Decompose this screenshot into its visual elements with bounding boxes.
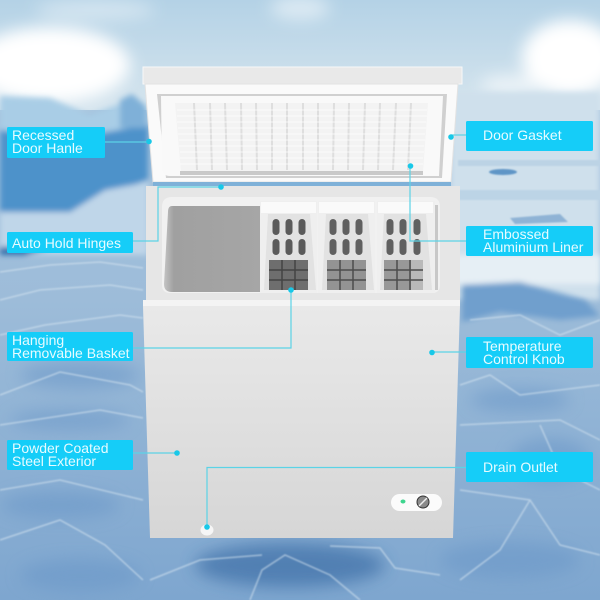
control panel: [391, 494, 442, 511]
gap between lid and cabinet: [153, 182, 451, 186]
basket 1: [260, 201, 317, 293]
far ice details right: [458, 131, 600, 224]
label: Hanging Removable Basket: Removable Basket: [12, 345, 130, 361]
label: Hanging Removable Basket: [7, 332, 133, 361]
lid: inner frame: [145, 84, 458, 182]
label: Door Gasket: [466, 121, 593, 151]
freezer: [143, 67, 462, 538]
label: Recessed Door Hanle: [7, 127, 105, 158]
lid: door gasket: [157, 94, 447, 178]
clouds: [0, 0, 600, 103]
cavity: [162, 197, 440, 293]
cabinet top: [146, 186, 460, 304]
label: Auto Hold Hinges: Auto Hold Hinges: [12, 235, 121, 251]
label: Temperature Control Knob: [466, 337, 593, 368]
label: Temperature Control Knob: Temperature: [483, 338, 562, 354]
drain outlet: [200, 524, 214, 536]
label: Door Gasket: Door Gasket: [483, 127, 562, 143]
label: Embossed Aluminium Liner: Aluminium Liner: [483, 239, 584, 255]
label: Hanging Removable Basket: Hanging: [12, 332, 64, 348]
lid: top strip: [143, 67, 462, 84]
ice blotches: [0, 361, 590, 591]
lid: embossed liner: [175, 103, 428, 175]
label: Embossed Aluminium Liner: [466, 226, 593, 256]
label: Powder Coated Steel Exterior: Powder Coated: [12, 440, 109, 456]
label: Drain Outlet: [466, 452, 593, 482]
label: Auto Hold Hinges: [7, 232, 133, 253]
label: Powder Coated Steel Exterior: [7, 440, 133, 470]
ice cracks: [0, 262, 600, 600]
basket 3: [377, 201, 435, 293]
label: Recessed Door Hanle: Door Hanle: [12, 140, 83, 156]
cabinet body: [143, 306, 460, 538]
label: Powder Coated Steel Exterior: Steel Exterior: [12, 453, 96, 469]
label: Recessed Door Hanle: Recessed: [12, 127, 74, 143]
basket 2: [318, 201, 375, 293]
label: Drain Outlet: Drain Outlet: [483, 459, 558, 475]
pale far ice right: [450, 92, 600, 300]
label: Embossed Aluminium Liner: Embossed: [483, 226, 549, 242]
cabinet front lip: [143, 300, 460, 306]
hinges: [220, 183, 384, 189]
callout lines and dots: [104, 134, 466, 530]
blue mountain left: [0, 94, 148, 255]
label: Temperature Control Knob: Control Knob: [483, 351, 565, 367]
